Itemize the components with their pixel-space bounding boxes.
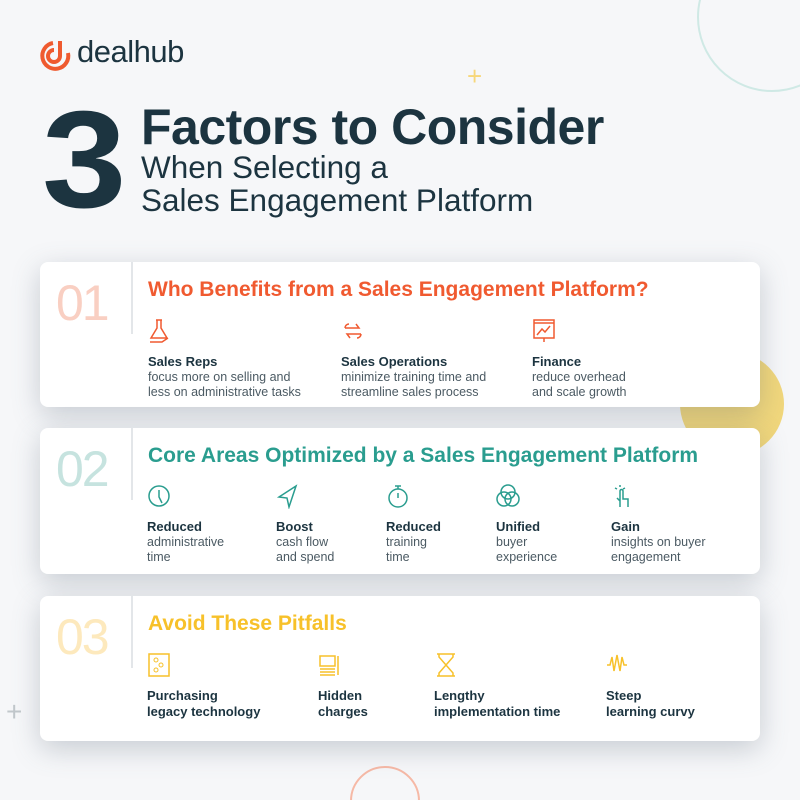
title: Factors to Consider: [141, 99, 604, 155]
heading: core areas: Core Areas Optimized by a Sales Engagement Platform: [148, 444, 698, 467]
item: unified: [496, 484, 557, 564]
item: finance: and scale growth: [532, 385, 627, 399]
title: 3: [42, 83, 126, 237]
item: gain: [611, 485, 706, 564]
item: boost: and spend: [276, 550, 334, 564]
item: boost: cash flow: [276, 535, 328, 549]
item: finance: Finance: [532, 354, 581, 369]
item: gain: insights on buyer: [611, 535, 706, 549]
item: sales reps: Sales Reps: [148, 354, 217, 369]
heading: who benefits: Who Benefits from a Sales Engagement Platform?: [148, 278, 649, 301]
item: sales reps: [148, 319, 301, 399]
item: sales operations: minimize training time and: [341, 370, 486, 384]
item: finance: reduce overhead: [532, 370, 626, 384]
item: reduced training: time: [386, 550, 410, 564]
item: unified: Unified: [496, 519, 540, 534]
item: finance: [532, 319, 627, 399]
item: legacy tech: Purchasing: [147, 688, 218, 703]
item: steep learning curve: Steep: [606, 688, 641, 703]
panel: core areas: 02: [56, 441, 108, 497]
panel: who benefits: [40, 262, 760, 407]
item: sales operations: Sales Operations: [341, 354, 447, 369]
decoration: gray plus: +: [6, 696, 22, 727]
logo: dealhub: [77, 34, 184, 69]
item: hidden charges: [318, 655, 368, 719]
panel: core areas: [40, 428, 760, 574]
panel: pitfalls: [40, 596, 760, 741]
item: reduced training: Reduced: [386, 519, 441, 534]
title: When Selecting a: [141, 149, 388, 185]
title: [42, 83, 604, 237]
panel: who benefits: 01: [56, 275, 108, 331]
item: legacy tech: legacy technology: [147, 704, 260, 719]
decoration: peach circle: [350, 766, 420, 800]
item: boost: Boost: [276, 519, 313, 534]
decoration: yellow plus: +: [467, 61, 482, 91]
item: legacy tech: [147, 653, 260, 719]
item: reduced training: [386, 485, 441, 564]
item: hidden charges: Hidden: [318, 688, 362, 703]
item: reduced admin time: administrative: [147, 535, 224, 549]
item: boost: [276, 484, 334, 564]
item: lengthy implementation: implementation time: [434, 704, 560, 719]
item: reduced admin time: time: [147, 550, 171, 564]
panel: pitfalls: 03: [56, 609, 108, 665]
item: steep learning curve: learning curvy: [606, 704, 695, 719]
item: reduced training: training: [386, 535, 427, 549]
item: reduced admin time: Reduced: [147, 519, 202, 534]
decoration: yellow circle: [680, 352, 784, 456]
item: unified: buyer: [496, 535, 527, 549]
item: unified: experience: [496, 550, 557, 564]
item: sales operations: [341, 323, 486, 399]
title: Sales Engagement Platform: [141, 182, 533, 218]
item: sales reps: focus more on selling and: [148, 370, 290, 384]
item: sales reps: less on administrative tasks: [148, 385, 301, 399]
heading: pitfalls: Avoid These Pitfalls: [148, 612, 347, 635]
item: sales operations: streamline sales process: [341, 385, 479, 399]
item: gain: engagement: [611, 550, 681, 564]
item: steep learning curve: [606, 654, 695, 719]
item: hidden charges: charges: [318, 704, 368, 719]
item: lengthy implementation: [434, 653, 560, 719]
decoration: teal circle: [697, 0, 800, 92]
item: gain: Gain: [611, 519, 640, 534]
item: reduced admin time: [147, 485, 224, 564]
item: lengthy implementation: Lengthy: [434, 688, 485, 703]
